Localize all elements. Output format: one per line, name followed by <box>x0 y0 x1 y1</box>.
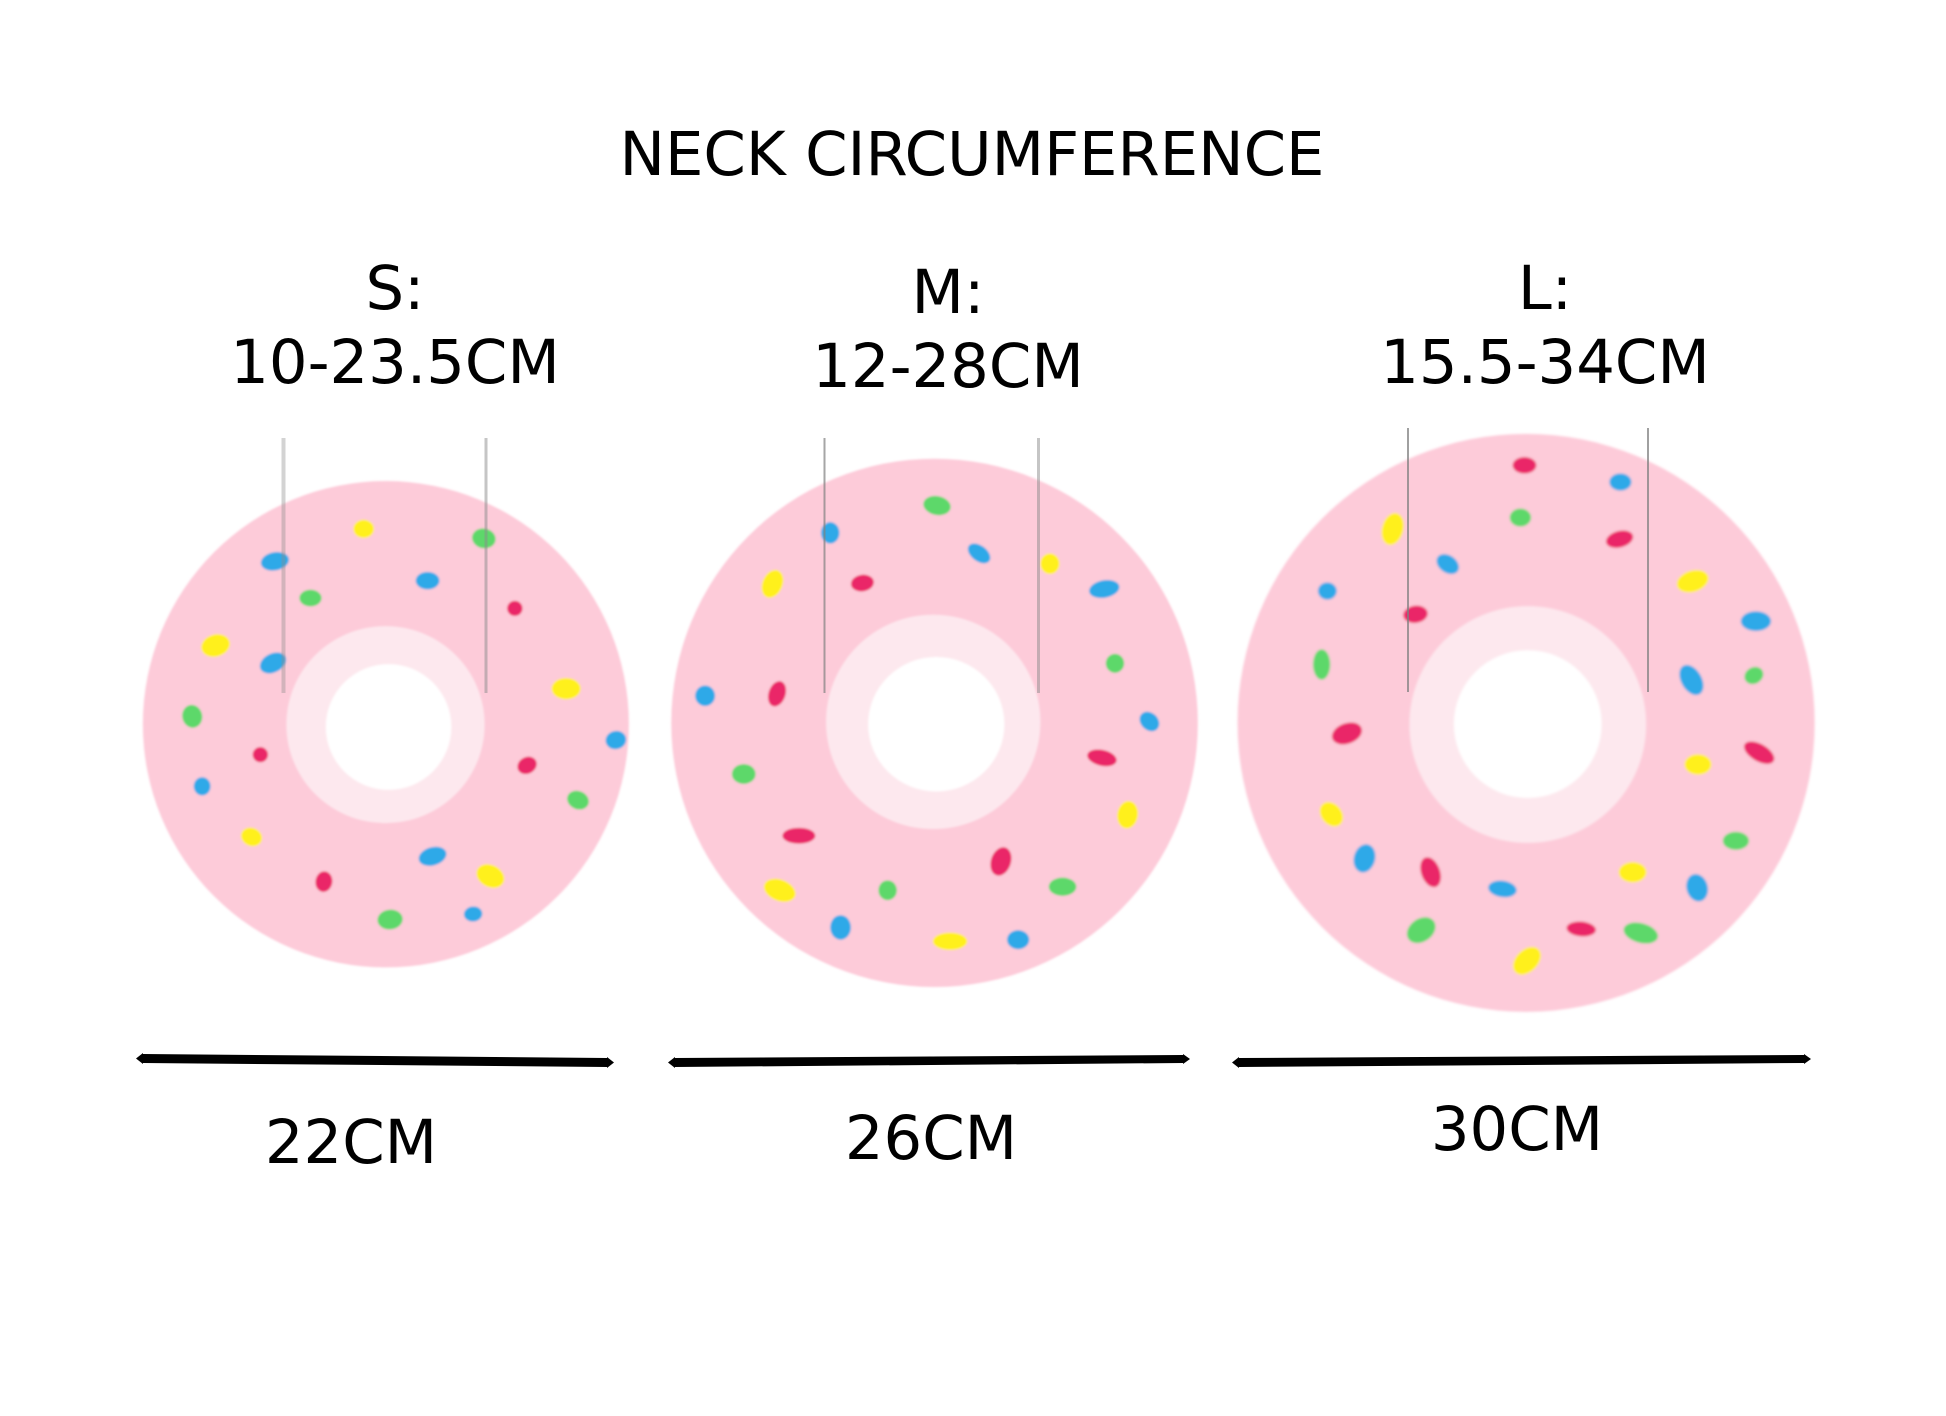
sprinkles L <box>1313 457 1778 980</box>
sprinkles M <box>695 494 1163 950</box>
neck guide lines M <box>824 438 1040 693</box>
width arrow L <box>1232 1054 1811 1068</box>
neck guide lines S <box>282 438 488 693</box>
neck guide lines L <box>1407 428 1649 692</box>
width label M: 26CM <box>845 1104 1017 1174</box>
title: NECK CIRCUMFERENCE <box>620 120 1324 190</box>
size label M <box>812 258 1084 402</box>
size label S <box>230 254 560 398</box>
width arrow S <box>136 1053 614 1068</box>
width label L: 30CM <box>1431 1095 1603 1165</box>
size label M: M: <box>912 258 984 328</box>
size label S: S: <box>365 254 425 324</box>
width arrow M <box>668 1054 1190 1068</box>
donut S <box>143 481 629 967</box>
width label S: 22CM <box>265 1108 437 1178</box>
size label L: L: <box>1518 254 1572 324</box>
donut L <box>1238 434 1815 1012</box>
size label L: 15.5-34CM <box>1380 328 1710 398</box>
sprinkles S <box>180 520 628 931</box>
donut M <box>671 459 1198 987</box>
size label S: 10-23.5CM <box>230 328 560 398</box>
size label M: 12-28CM <box>812 332 1084 402</box>
size label L <box>1380 254 1710 398</box>
